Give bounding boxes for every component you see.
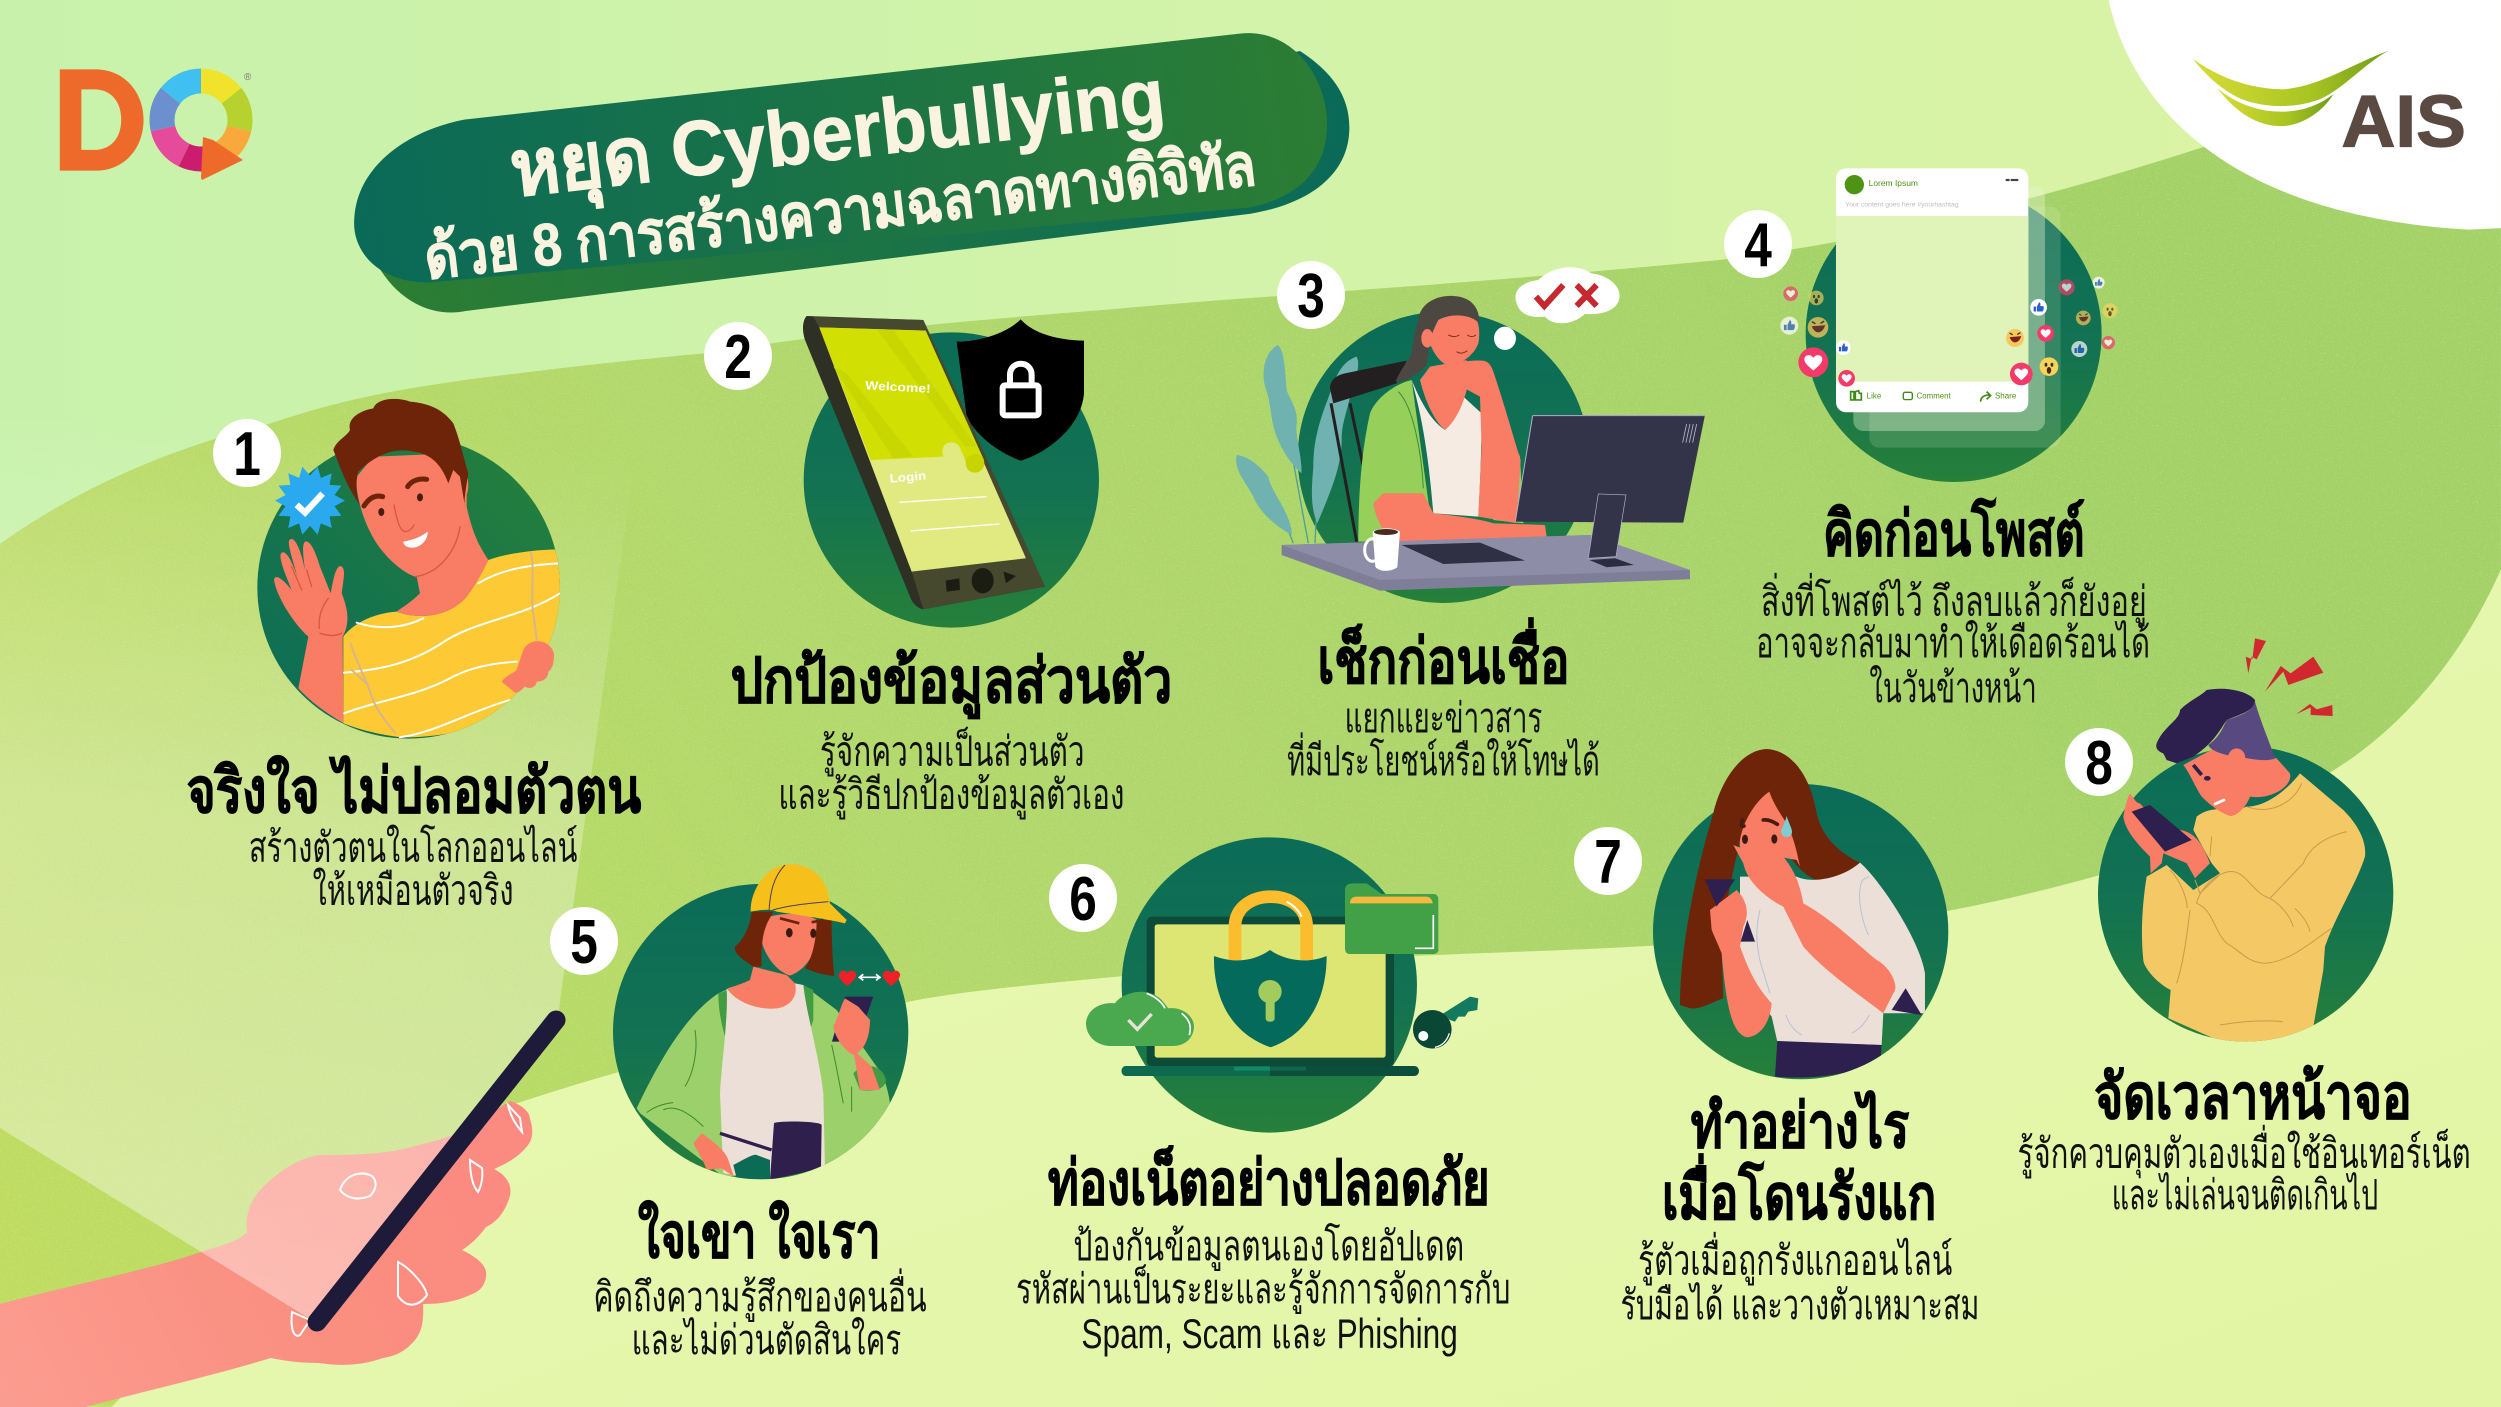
number badge 5: 5 (570, 907, 598, 976)
post card: Comment (1917, 392, 1951, 401)
post card: Lorem Ipsum (1869, 179, 1918, 188)
description: รู้ตัวเมื่อถูกรังแกออนไลน์ (1638, 1231, 1952, 1285)
title line 2: ด้วย 8 การสร้างความฉลาดทางดิจิทัล (421, 131, 1259, 292)
number badge 2: 2 (724, 322, 752, 391)
illustration: social media post with reactions (1780, 168, 2117, 482)
description (1287, 694, 1600, 784)
title line 1: หยุด Cyberbullying (506, 51, 1170, 218)
description: สิ่งที่โพสต์ไว้ ถึงลบแล้วก็ยังอยู่ (1761, 573, 2147, 627)
hand (0, 1101, 532, 1407)
post card: Share (1995, 392, 2017, 401)
number badge 8: 8 (2085, 728, 2113, 797)
illustration: woman thinking at a computer (1236, 267, 1705, 603)
background: light lower area (0, 500, 2501, 1407)
laptop (1121, 917, 1419, 1076)
illustration: laptop with shield padlock, cloud, folder and key (1086, 837, 1478, 1133)
number badge 3 (1277, 261, 1345, 330)
icon: shield with padlock (957, 319, 1084, 461)
icon: cloud (1086, 992, 1194, 1046)
description: รหัสผ่านเป็นระยะและรู้จักการจัดการกับ (1016, 1264, 1510, 1314)
description: อาจจะกลับมาทำให้เดือดร้อนได้ (1756, 619, 2150, 666)
number badge 1 (213, 419, 281, 488)
number badge 4: 4 (1744, 210, 1772, 279)
description: ให้เหมือนตัวจริง (313, 866, 514, 913)
thought bubble (1494, 267, 1620, 350)
heading: เมื่อโดนรังแก (1662, 1154, 1936, 1233)
illustration: smiling man waving (257, 399, 561, 739)
panel: step 2 (704, 316, 1172, 820)
icon: verified badge (275, 467, 345, 535)
panel: step 4 (1724, 168, 2150, 711)
panel: step 8 (2018, 638, 2471, 1218)
description: รู้จักความเป็นส่วนตัว (820, 727, 1085, 777)
floating reactions (1780, 277, 2117, 387)
logo: AIS: AIS (2341, 81, 2466, 163)
number badge 5 (550, 907, 618, 976)
number badge 2 (704, 322, 772, 391)
post card: Your content goes here #yourhashtag (1845, 203, 1959, 209)
icon: folder (1345, 883, 1438, 954)
desk (1282, 535, 1690, 591)
white corner behind AIS logo (2109, 0, 2501, 230)
description: แยกแยะข่าวสาร (1345, 694, 1542, 741)
heading: ปกป้องข้อมูลส่วนตัว (731, 647, 1172, 719)
heading: ทำอย่างไร (1691, 1090, 1909, 1161)
number badge 8 (2065, 728, 2133, 797)
description: ที่มีประโยชน์หรือให้โทษได้ (1287, 732, 1600, 784)
icon: smartphone (803, 316, 1045, 609)
description: คิดถึงความรู้สึกของคนอื่น (593, 1268, 927, 1322)
icon: smartphone: Login (889, 468, 927, 486)
description (1016, 1222, 1510, 1357)
chair (1330, 361, 1407, 542)
number badge 6 (1049, 864, 1117, 933)
illustration: girl in yellow cap with phone (613, 864, 908, 1180)
description (593, 1268, 927, 1363)
heading: เช็กก่อนเชื่อ (1317, 618, 1569, 697)
illustration: phone with login and shield (803, 316, 1099, 628)
number badge 3: 3 (1297, 261, 1325, 330)
description: และรู้วิธีปกป้องข้อมูลตัวเอง (778, 771, 1124, 820)
coffee mug (1365, 528, 1400, 571)
panel: step 1 (187, 399, 641, 913)
heading (1662, 1090, 1936, 1233)
logo: DQ (60, 69, 252, 180)
illustration: angry man looking at phone (2098, 638, 2393, 1042)
panel: step 6 (1016, 837, 1510, 1357)
icon: padlock shield (1214, 897, 1327, 1047)
heading: จัดเวลาหน้าจอ (2094, 1063, 2412, 1132)
icon: anger bolts (2246, 638, 2333, 716)
panel: step 5 (550, 864, 927, 1363)
icon: phone in hand (832, 997, 880, 1090)
number badge 6: 6 (1069, 864, 1097, 933)
monitor (1515, 415, 1705, 567)
description: รับมือได้ และวางตัวเหมาะสม (1621, 1281, 1979, 1328)
number badge 1: 1 (233, 419, 261, 488)
description (1756, 573, 2150, 711)
number badge 7: 7 (1594, 827, 1622, 896)
description: ป้องกันข้อมูลตนเองโดยอัปเดต (1073, 1222, 1464, 1271)
heading: ใจเขา ใจเรา (638, 1200, 880, 1271)
number badge 4 (1724, 210, 1792, 279)
number badge 7 (1574, 827, 1642, 896)
illustration: shocked girl covering mouth (1653, 749, 1948, 1079)
icon: key (1413, 997, 1478, 1049)
plant leaves (1236, 345, 1358, 543)
description: Spam, Scam และ Phishing (1081, 1310, 1458, 1357)
light beam (0, 420, 640, 1322)
logo: AIS (2193, 51, 2466, 163)
icon: hearts with arrow (839, 971, 900, 986)
illustration: hand holding phone with light beam (0, 420, 640, 1407)
phone (317, 1020, 556, 1322)
description (1621, 1231, 1979, 1328)
icon: smartphone: Welcome! (865, 378, 931, 396)
panel: step 3 (1236, 261, 1705, 784)
panel: step 7 (1574, 749, 1979, 1328)
title banner (354, 33, 1349, 312)
icon: sweat drop (1781, 816, 1792, 837)
description: และไม่ด่วนตัดสินใคร (632, 1316, 901, 1363)
description (778, 727, 1124, 820)
description: ในวันข้างหน้า (1869, 664, 2037, 711)
description (249, 823, 577, 913)
logo: DQ: ® (244, 72, 252, 83)
heading: จริงใจ ไม่ปลอมตัวตน (187, 755, 641, 826)
heading: คิดก่อนโพสต์ (1823, 497, 2085, 569)
description: สร้างตัวตนในโลกออนไลน์ (249, 823, 577, 870)
post card: Like (1867, 392, 1882, 401)
post card (1836, 168, 2028, 412)
heading: ท่องเน็ตอย่างปลอดภัย (1048, 1145, 1490, 1218)
description (2018, 1125, 2471, 1218)
